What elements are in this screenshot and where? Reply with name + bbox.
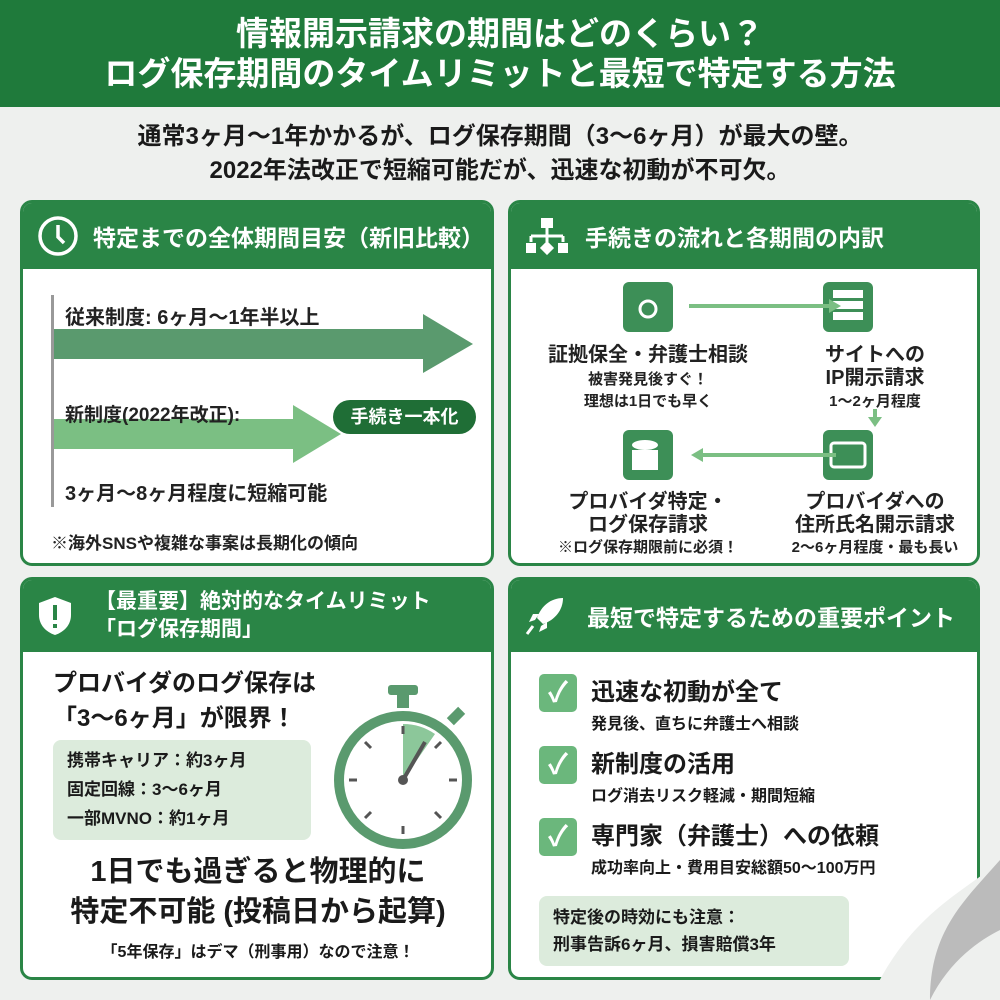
panel header: key points: 最短で特定するための重要ポイント	[587, 605, 955, 631]
panel header: flow	[511, 203, 977, 269]
point 1: ✓	[548, 677, 568, 708]
panel header: flow: 手続きの流れと各期間の内訳	[585, 225, 884, 251]
point 2: 新制度の活用	[591, 751, 735, 778]
flow diagram: 被害発見後すぐ！	[588, 370, 708, 388]
info box: retention periods: 固定回線：3〜6ヶ月	[67, 780, 222, 799]
info box: retention periods: 一部MVNO：約1ヶ月	[67, 809, 229, 828]
warning text	[70, 856, 446, 928]
decoration: page curl	[880, 860, 1000, 1000]
panel: procedure flow	[508, 200, 980, 566]
point 2: ログ消去リスク軽減・期間短縮	[591, 788, 815, 805]
title: ログ保存期間のタイムリミットと最短で特定する方法	[104, 55, 896, 92]
timeline chart	[51, 295, 473, 553]
callout: unification: 手続き一本化	[350, 407, 458, 427]
subtitle: 2022年法改正で短縮可能だが、迅速な初動が不可欠。	[210, 157, 790, 184]
flow diagram: プロバイダ特定・	[568, 489, 728, 513]
info box: retention periods	[53, 740, 311, 840]
subtitle: 通常3ヶ月〜1年かかるが、ログ保存期間（3〜6ヶ月）が最大の壁。	[138, 123, 862, 150]
flow diagram: 2〜6ヶ月程度・最も長い	[792, 538, 958, 556]
point 3: ✓	[548, 821, 568, 852]
subtitle	[138, 123, 862, 184]
panel: overall period	[20, 200, 494, 566]
note: 5-year rumor: 「5年保存」はデマ（刑事用）なので注意！	[102, 944, 414, 961]
point 1	[539, 674, 799, 733]
panel header: overall period	[23, 203, 491, 269]
icon: stopwatch	[334, 685, 472, 849]
note box: statute of limitations	[539, 896, 849, 966]
flow diagram: サイトへの	[825, 344, 925, 366]
timeline chart: 3ヶ月〜8ヶ月程度に短縮可能	[65, 482, 327, 505]
heading: provider log retention: 「3〜6ヶ月」が限界！	[53, 705, 296, 732]
timeline chart: ※海外SNSや複雑な事案は長期化の傾向	[51, 533, 358, 553]
flow diagram: 1〜2ヶ月程度	[829, 392, 921, 410]
note box: statute of limitations: 特定後の時効にも注意：	[553, 908, 740, 927]
info box: retention periods: 携帯キャリア：約3ヶ月	[67, 751, 246, 770]
title	[0, 0, 1000, 107]
note box: statute of limitations: 刑事告訴6ヶ月、損害賠償3年	[553, 935, 776, 954]
point 1: 迅速な初動が全て	[591, 679, 783, 706]
point 3	[539, 818, 879, 877]
warning text: 特定不可能 (投稿日から起算)	[70, 896, 446, 928]
flow diagram	[548, 282, 958, 556]
warning text: 1日でも過ぎると物理的に	[90, 856, 426, 888]
timeline chart: 新制度(2022年改正):	[65, 403, 240, 426]
point 3: 専門家（弁護士）への依頼	[591, 823, 879, 850]
heading: provider log retention	[53, 670, 316, 732]
panel header: overall period: 特定までの全体期間目安（新旧比較）	[93, 225, 484, 251]
panel: log retention time limit	[20, 577, 494, 980]
point 2: ✓	[548, 749, 568, 780]
flow diagram: ログ保存請求	[588, 512, 708, 536]
timeline chart: 従来制度: 6ヶ月〜1年半以上	[65, 306, 319, 329]
title: 情報開示請求の期間はどのくらい？	[236, 15, 764, 52]
heading: provider log retention: プロバイダのログ保存は	[53, 670, 316, 697]
flow diagram: IP開示請求	[826, 366, 924, 389]
panel header: time limit	[23, 580, 491, 652]
panel: key points	[508, 577, 980, 980]
flow diagram: 証拠保全・弁護士相談	[548, 342, 748, 366]
panel header: key points	[511, 580, 977, 652]
flow diagram: ※ログ保存期限前に必須！	[558, 538, 738, 556]
flow diagram: 住所氏名開示請求	[795, 513, 955, 536]
flow diagram: 理想は1日でも早く	[584, 393, 712, 410]
panel header: time limit: 「ログ保存期間」	[95, 618, 263, 641]
point 1: 発見後、直ちに弁護士へ相談	[591, 716, 799, 733]
flow diagram: プロバイダへの	[805, 489, 945, 513]
callout: unification	[333, 400, 476, 434]
point 3: 成功率向上・費用目安総額50〜100万円	[591, 860, 876, 877]
panel header: time limit: 【最重要】絶対的なタイムリミット	[95, 590, 431, 613]
point 2	[539, 746, 815, 805]
